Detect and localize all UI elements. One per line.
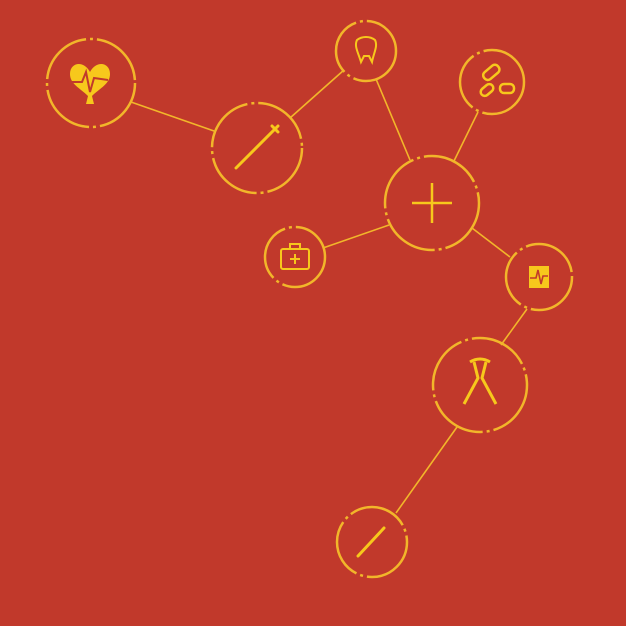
icon: ecg document — [529, 266, 549, 288]
icon: heart ecg — [70, 64, 110, 104]
ring: heart — [47, 39, 135, 127]
icon: medkit — [281, 244, 309, 269]
ring: medkit — [265, 227, 325, 287]
ring: syringe — [212, 103, 302, 193]
icon: syringe — [236, 126, 278, 168]
rings — [47, 21, 572, 577]
icon: tooth — [356, 37, 376, 62]
connector lines — [131, 70, 527, 513]
ring: scalpel — [337, 507, 407, 577]
ring: cross — [385, 156, 479, 250]
ring: pills — [460, 50, 524, 114]
icon: cross — [412, 183, 452, 223]
ring: tooth — [336, 21, 396, 81]
icon: tongs — [464, 359, 496, 404]
icon: scalpel — [358, 528, 384, 556]
ring: ecg — [506, 244, 572, 310]
ring: tongs — [433, 338, 527, 432]
icon: pills — [479, 63, 514, 98]
